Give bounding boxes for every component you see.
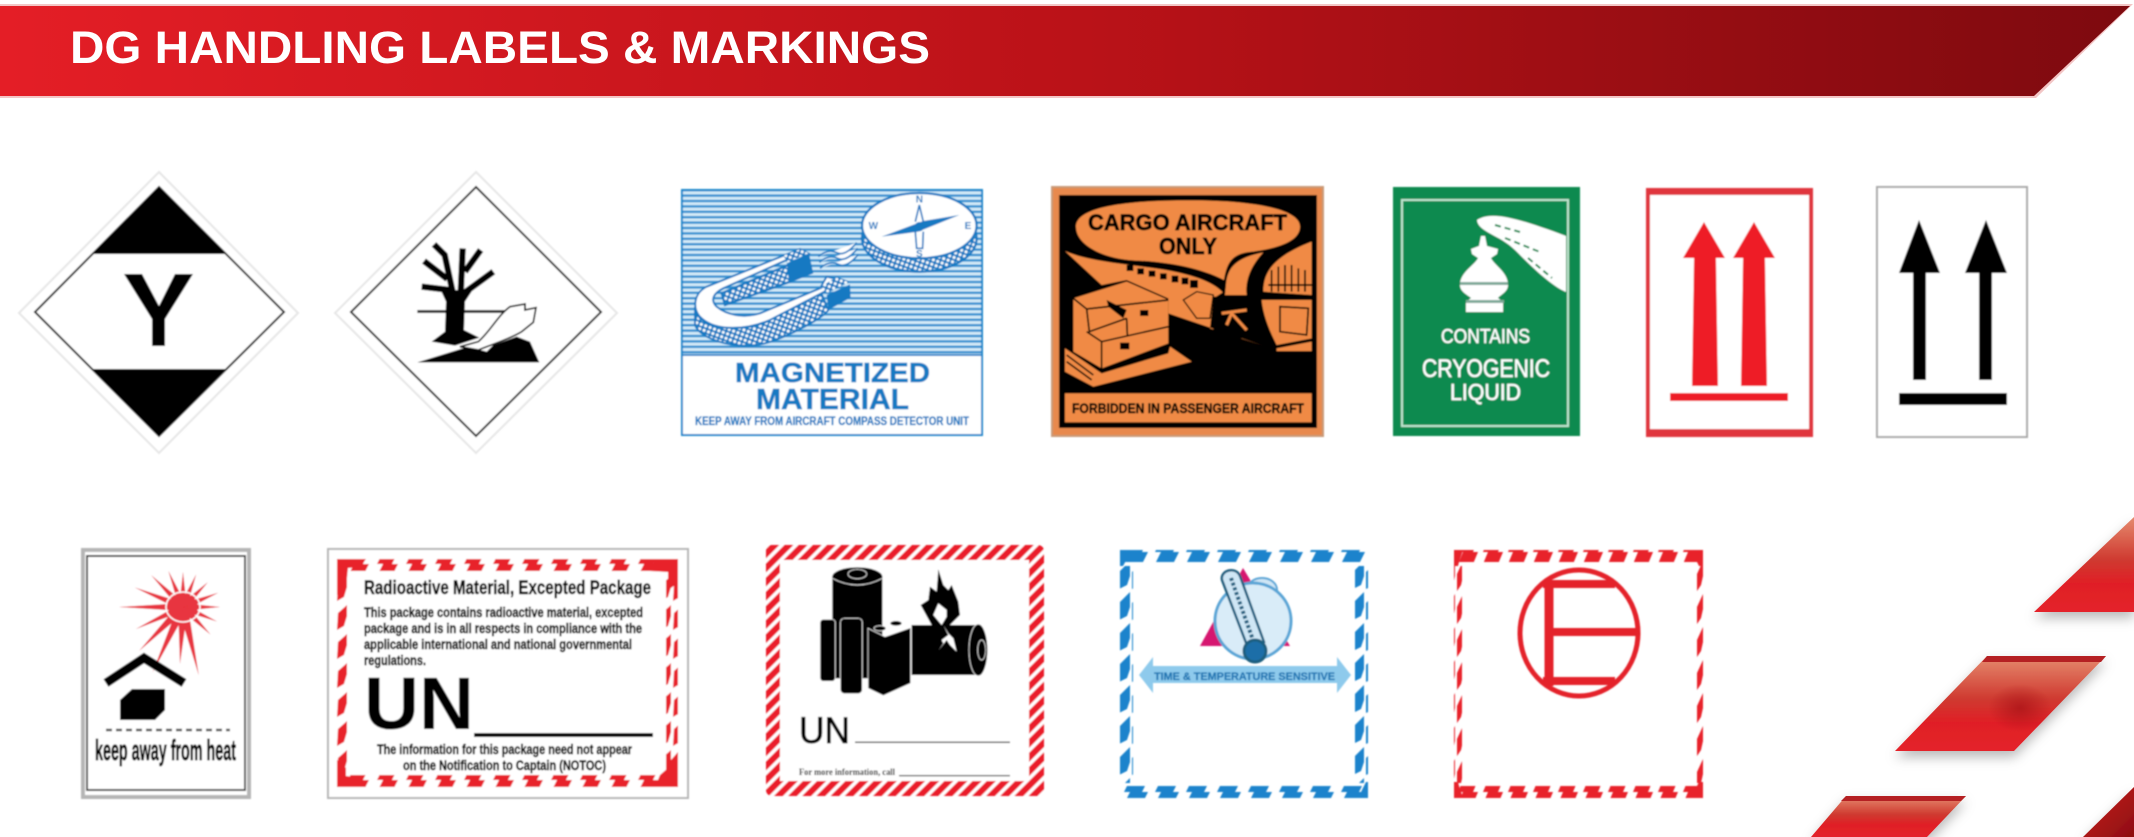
icon: roof and box bbox=[106, 658, 230, 730]
icon: cryogenic flask and vapour bbox=[1460, 216, 1566, 312]
label: radioactive material excepted package: package and is in all respects in compliance with the bbox=[364, 620, 642, 636]
icon: magnet and compass: S bbox=[916, 249, 923, 260]
icon: magnet and compass: N bbox=[916, 194, 923, 205]
label: keep away from heat: keep away from heat bbox=[95, 735, 236, 767]
arrow banner bbox=[1139, 657, 1351, 693]
label: environmentally hazardous diamond bbox=[335, 172, 617, 453]
icon: thermometer, clock and triangle bbox=[1200, 568, 1291, 662]
label: radioactive material excepted package: This package contains radioactive material, excepted bbox=[364, 604, 643, 620]
label: magnetized material: KEEP AWAY FROM AIRCRAFT COMPASS DETECTOR UNIT bbox=[695, 416, 969, 428]
label: radioactive material excepted package: The information for this package need not appear bbox=[377, 741, 632, 757]
icon: aircraft loading scene bbox=[1065, 200, 1312, 422]
decorative red parallelograms bbox=[1811, 517, 2134, 837]
icon: two black arrows bbox=[1899, 220, 2007, 405]
label: lithium battery handling bbox=[766, 545, 1044, 796]
title: DG HANDLING LABELS & MARKINGS bbox=[70, 22, 930, 73]
label: black this-way-up arrows bbox=[1877, 187, 2027, 437]
icon: magnet and compass: E bbox=[965, 221, 972, 232]
red dashed frame bbox=[337, 559, 678, 787]
label: contains cryogenic liquid: CONTAINS bbox=[1441, 326, 1530, 348]
label: cargo aircraft only: CARGO AIRCRAFT bbox=[1088, 210, 1288, 235]
icon: magnet and compass bbox=[695, 193, 977, 346]
label: time and temperature sensitive bbox=[1120, 550, 1368, 798]
label: magnetized material: MATERIAL bbox=[756, 384, 909, 416]
label: red this-way-up arrows bbox=[1646, 188, 1813, 436]
label: radioactive material excepted package: UN bbox=[364, 662, 474, 745]
icon: two red arrows bbox=[1670, 222, 1788, 401]
red dashed frame bbox=[1454, 550, 1703, 798]
icon: magnet and compass: W bbox=[869, 221, 879, 232]
label: magnetized material bbox=[682, 190, 982, 435]
label: cargo aircraft only: ONLY bbox=[1159, 233, 1217, 259]
label: cargo aircraft only: FORBIDDEN IN PASSENGER AIRCRAFT bbox=[1072, 400, 1304, 416]
label: contains cryogenic liquid: LIQUID bbox=[1450, 379, 1521, 405]
label: contains cryogenic liquid: CRYOGENIC bbox=[1422, 355, 1550, 383]
label: red dashed circle-E bbox=[1454, 550, 1703, 798]
label: radioactive material excepted package: applicable international and national governmental bbox=[364, 636, 632, 652]
label: radioactive material excepted package: Radioactive Material, Excepted Package bbox=[364, 578, 651, 599]
icon: batteries and flame bbox=[820, 567, 988, 696]
title banner bbox=[0, 4, 2133, 98]
icon: dead tree and fish bbox=[417, 244, 539, 362]
label: radioactive material excepted package bbox=[328, 549, 688, 798]
label: magnetized material: MAGNETIZED bbox=[735, 357, 930, 388]
label: contains cryogenic liquid bbox=[1393, 187, 1580, 436]
icon: circle E symbol bbox=[1520, 570, 1638, 696]
label: radioactive material excepted package: on the Notification to Captain (NOTOC) bbox=[403, 757, 606, 773]
icon: sun rays bbox=[119, 569, 220, 676]
label: lithium battery handling: UN bbox=[799, 710, 850, 751]
label: time and temperature sensitive: TIME & TEMPERATURE SENSITIVE bbox=[1154, 671, 1335, 683]
label: cargo aircraft only bbox=[1052, 187, 1323, 436]
blue dashed frame bbox=[1120, 550, 1368, 798]
label: limited quantity Y diamond bbox=[19, 172, 298, 453]
label: lithium battery handling: For more information, call bbox=[799, 768, 895, 778]
label: keep away from heat bbox=[83, 550, 249, 797]
label: radioactive material excepted package: regulations. bbox=[364, 652, 426, 668]
